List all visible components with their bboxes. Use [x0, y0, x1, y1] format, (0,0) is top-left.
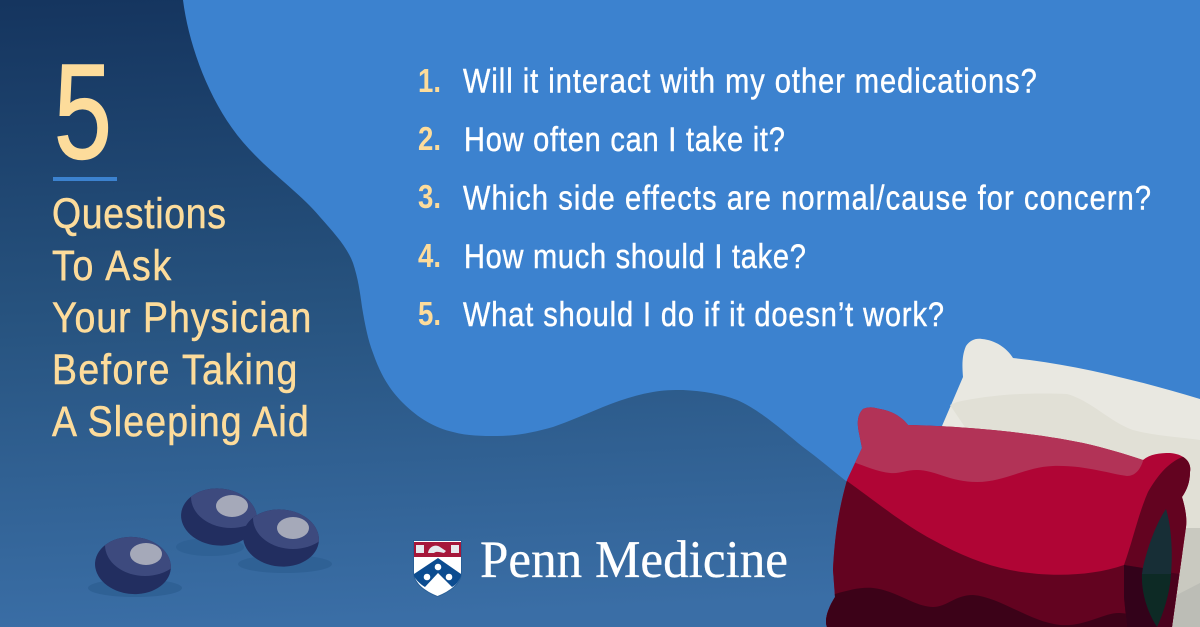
question 4: How much should I take? [464, 237, 806, 276]
heading line 5: A Sleeping Aid [52, 398, 309, 446]
pill 3 [243, 509, 319, 567]
icon: white pillow [942, 339, 1200, 627]
icon: sleeping pills [88, 488, 332, 597]
pillow shadow [826, 480, 1182, 627]
headline block [52, 36, 311, 446]
question 3: Which side effects are normal/cause for concern? [463, 178, 1151, 217]
wordmark: Penn Medicine [480, 531, 788, 589]
heading line 1: Questions [52, 190, 226, 238]
heading line 4: Before Taking [52, 346, 297, 394]
pillow deep shadow [826, 588, 1127, 627]
question 1: 1. [418, 62, 441, 99]
question 5: What should I do if it doesn’t work? [463, 295, 944, 334]
heading line 2: To Ask [52, 242, 172, 290]
heading line 3: Your Physician [52, 294, 311, 342]
pill 2 [181, 488, 257, 546]
rim lower shade [1157, 572, 1179, 627]
question 5: 5. [418, 295, 441, 332]
opening lower shade [1142, 574, 1171, 627]
pillow body [820, 400, 1200, 627]
rim inner shade [1124, 565, 1157, 627]
pill 1 [95, 536, 171, 594]
pillow opening [1142, 509, 1172, 574]
question list [418, 61, 1151, 334]
Penn Medicine logo [413, 531, 788, 597]
question 4: 4. [418, 237, 441, 274]
pill shadows [88, 538, 332, 597]
question 1: Will it interact with my other medications? [463, 61, 1037, 100]
big number 5: 5 [54, 36, 112, 187]
icon: Penn shield [413, 540, 462, 597]
question 2: 2. [418, 120, 441, 157]
question 3: 3. [418, 178, 441, 215]
pillow top highlight [855, 407, 1143, 482]
question 2: How often can I take it? [464, 120, 785, 159]
pillow opening rim [1124, 456, 1190, 627]
underline rule [53, 177, 117, 181]
icon: red pillow [820, 400, 1200, 627]
